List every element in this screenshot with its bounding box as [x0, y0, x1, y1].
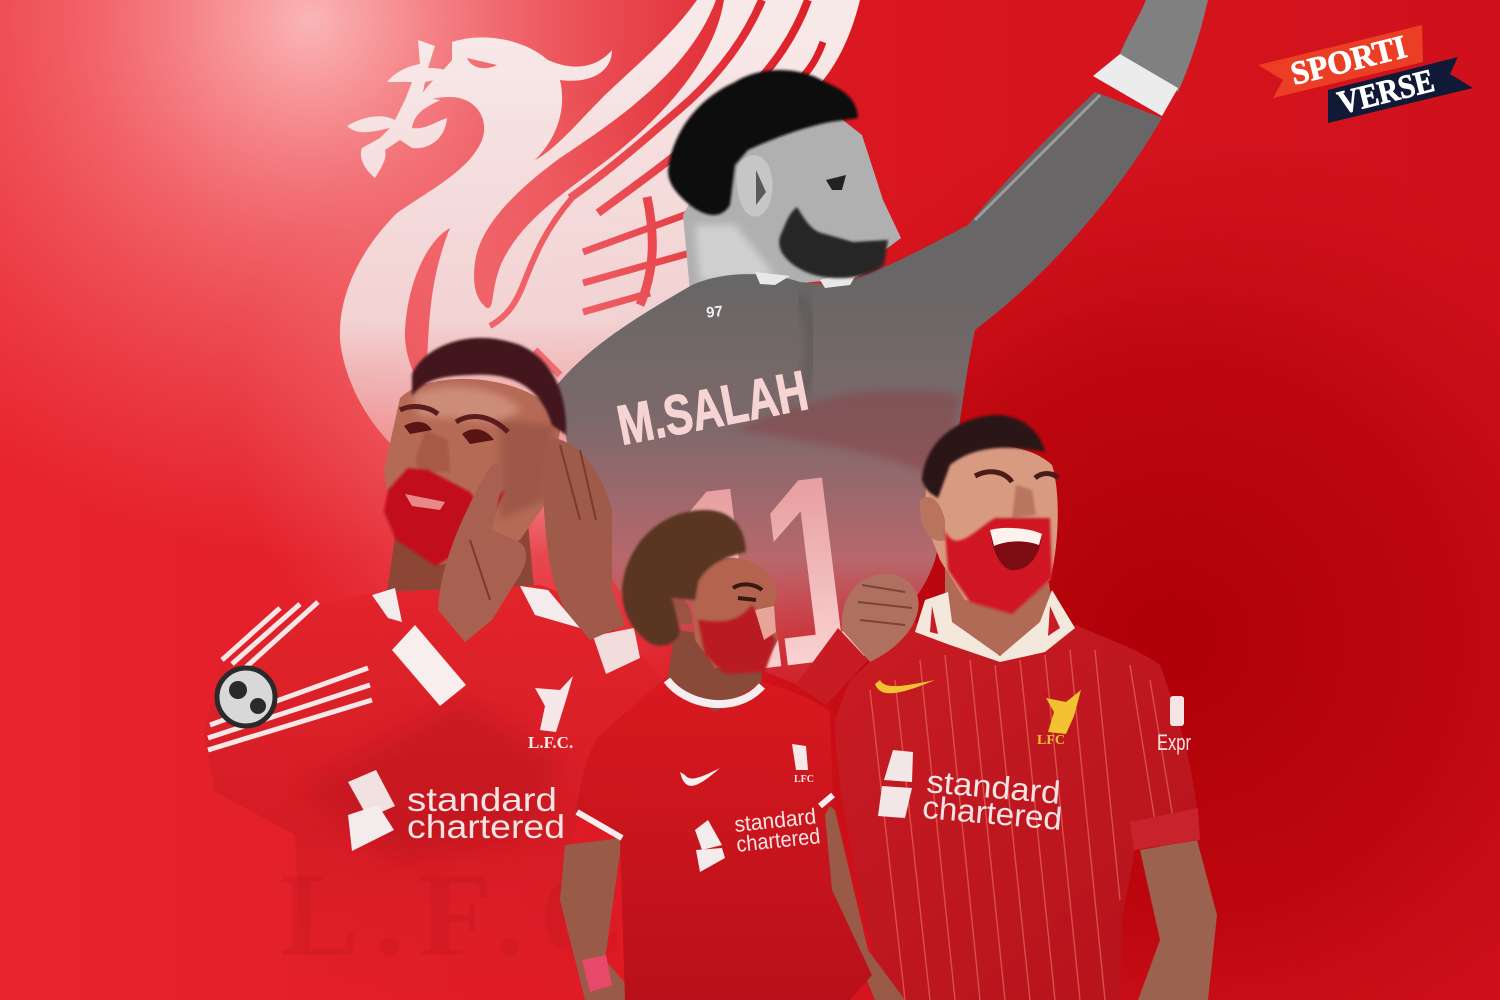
open mouth [755, 606, 776, 640]
collar [915, 590, 1075, 662]
cuff [1093, 54, 1178, 116]
neck [945, 560, 1055, 660]
sponsor icon [878, 750, 913, 818]
sleeve cuff [1130, 808, 1200, 850]
club crest: LFC [1037, 733, 1065, 748]
crest: L.F.C. [528, 733, 573, 752]
eye [826, 175, 846, 190]
neck [385, 490, 535, 645]
cuffs [392, 625, 466, 706]
nose [415, 430, 450, 472]
beard [779, 207, 888, 278]
lips [405, 494, 445, 510]
jersey [835, 622, 1200, 1000]
left player applauding [204, 338, 670, 1000]
sponsor icon [695, 820, 725, 872]
ear [737, 155, 773, 217]
eyes [400, 407, 508, 444]
sponsor text: standard [733, 804, 817, 837]
rear hand [542, 438, 625, 640]
jersey [576, 678, 872, 1000]
right player celebrating [796, 415, 1217, 1000]
navy ribbon [1328, 57, 1473, 123]
front hand [438, 464, 526, 642]
crest: LFC [794, 774, 814, 785]
ear [920, 497, 945, 541]
sleeve sponsor [1157, 696, 1191, 755]
sponsor text: standard [407, 781, 557, 818]
red beard [698, 605, 776, 674]
grey player Salah from behind [557, 0, 1208, 735]
open mouth [990, 528, 1042, 570]
collar highlight [755, 268, 860, 288]
sponsor text: chartered [407, 808, 565, 845]
head and neck skin [683, 110, 901, 292]
Sportiverse logo [1258, 25, 1473, 123]
orange ribbon [1258, 25, 1423, 98]
curly hair [622, 510, 746, 646]
club crest [1037, 690, 1081, 748]
eyes [975, 472, 1058, 482]
ear [672, 598, 692, 625]
VERSE wordmark: VERSE [1334, 63, 1438, 122]
face [925, 446, 1058, 612]
player name: M.SALAH [612, 358, 813, 457]
olive branch [347, 40, 455, 178]
crest [528, 676, 573, 752]
red beard [945, 518, 1052, 614]
crest [792, 744, 814, 785]
nose shading [1012, 485, 1036, 518]
sponsor icon [348, 770, 395, 851]
cheek shadow [500, 420, 555, 520]
liver bird crest [340, 0, 860, 570]
wrist tape [582, 955, 612, 992]
sleeve cuffs [577, 795, 833, 838]
forehead highlight [412, 387, 522, 422]
swoosh [680, 768, 720, 786]
teeth [990, 528, 1042, 546]
hair [668, 70, 858, 215]
pinstripes [870, 650, 1175, 1000]
face [690, 558, 778, 670]
sponsor text: standard [925, 763, 1062, 811]
wristband and fist [796, 574, 919, 705]
sponsor text [921, 763, 1066, 837]
SPORTI wordmark: SPORTI [1287, 29, 1410, 93]
raised forearm [1118, 0, 1208, 92]
shirt number: 11 [655, 417, 885, 735]
sponsor text: chartered [735, 823, 821, 857]
faded L.F.C. watermark: L.F.C. [280, 848, 670, 981]
chest crest: 97 [705, 303, 724, 322]
sleeve stripes [208, 602, 372, 750]
arms [560, 800, 905, 1000]
sleeve sponsor: Expr [1157, 730, 1191, 755]
red beard [384, 468, 505, 566]
collar [667, 680, 762, 704]
jersey [204, 585, 662, 1000]
shirt with name and number [557, 54, 1178, 735]
right arm [1138, 840, 1217, 1000]
neck [667, 630, 762, 712]
nike swoosh [875, 680, 935, 693]
neck shading [695, 225, 775, 282]
face [384, 379, 562, 565]
hair [412, 338, 566, 435]
collar [372, 586, 580, 628]
hair [922, 415, 1045, 498]
middle player shouting [560, 510, 905, 1000]
champions league badge [217, 668, 275, 726]
sponsor text [733, 803, 821, 857]
sponsor text: chartered [921, 789, 1064, 837]
brow and eye [733, 584, 762, 600]
sponsor text [407, 781, 565, 845]
